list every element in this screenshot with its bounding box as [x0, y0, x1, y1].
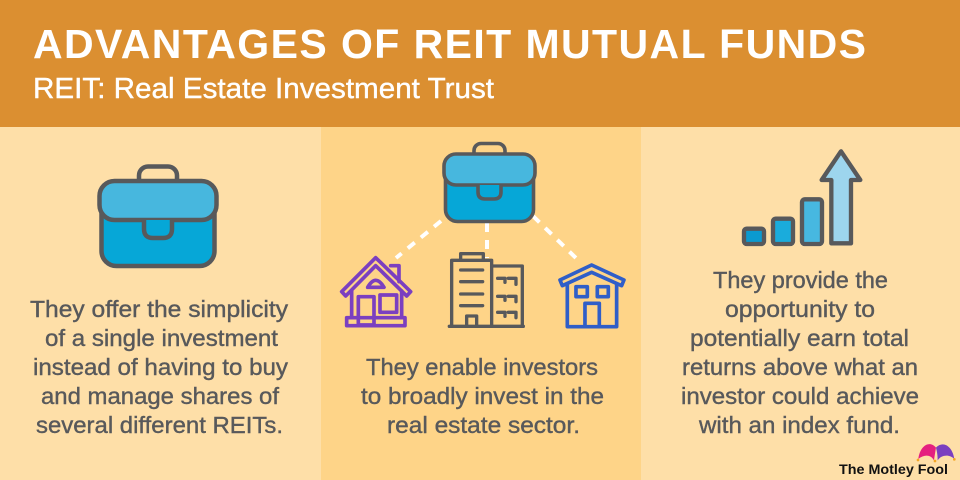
text block: middle: real estate sector. — [387, 412, 580, 438]
panel: right background — [641, 127, 960, 480]
text block: right: They provide the — [713, 267, 888, 293]
text block: right: opportunity to — [725, 296, 875, 322]
text block: middle: They enable investors — [366, 354, 598, 380]
text block: left: of a single investment — [45, 325, 279, 351]
logo: The Motley Fool — [839, 444, 956, 477]
text block: left: several different REITs. — [36, 412, 283, 438]
connector: dashed lines — [396, 216, 580, 262]
text block: right: with an index fund. — [698, 412, 900, 438]
icon: briefcase left — [100, 166, 216, 266]
text block: right: investor could achieve — [681, 383, 919, 409]
text block: right: returns above what an — [682, 354, 918, 380]
text block: left: and manage shares of — [41, 383, 280, 409]
logo: The Motley Fool: The Motley Fool — [839, 461, 948, 477]
icon: briefcase center — [444, 144, 535, 222]
title: ADVANTAGES OF REIT MUTUAL FUNDS — [33, 21, 866, 67]
icon: office buildings — [449, 254, 523, 326]
text block: middle: to broadly invest in the — [361, 383, 604, 409]
icon: purple house — [342, 258, 411, 326]
icon: growth bars and arrow — [744, 151, 860, 244]
header band — [0, 0, 960, 127]
text block: right — [681, 267, 919, 438]
panel: left background — [0, 127, 321, 480]
text block: left: They offer the simplicity — [30, 296, 289, 322]
icon: blue house — [560, 265, 624, 327]
text block: left — [30, 296, 289, 438]
text block: right: potentially earn total — [690, 325, 909, 351]
subtitle: REIT: Real Estate Investment Trust — [33, 73, 494, 105]
panel: middle background — [321, 127, 641, 480]
text block: left: instead of having to buy — [33, 354, 289, 380]
text block: middle — [361, 354, 604, 438]
